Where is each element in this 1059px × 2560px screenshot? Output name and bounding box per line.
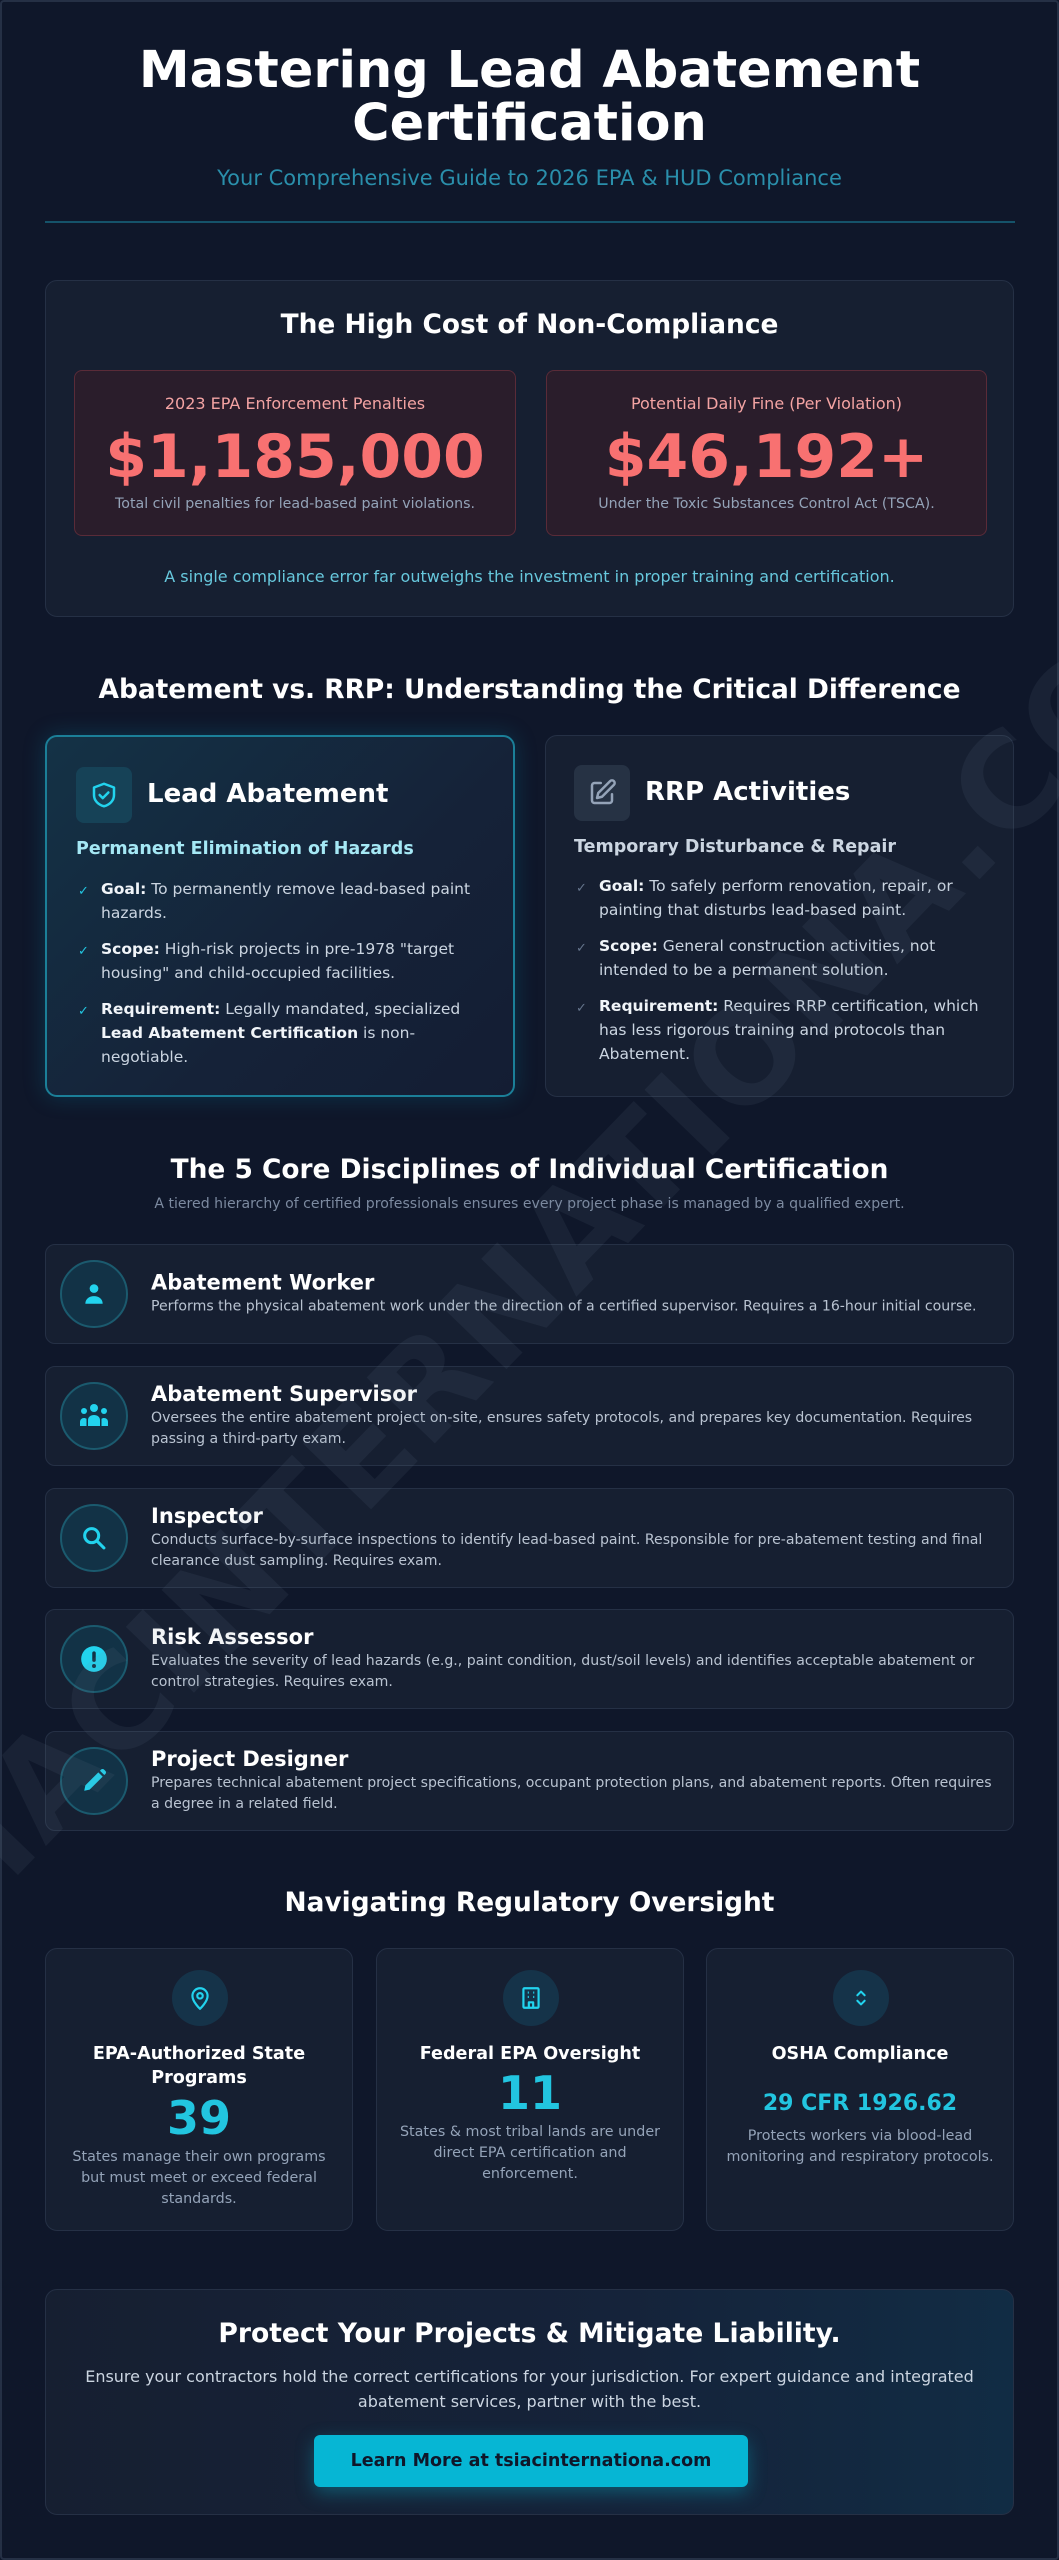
panel: OSHA: Protects workers via blood-lead monitoring and respiratory protocols. <box>726 2128 994 2165</box>
tagline: A single compliance error far outweighs the investment in proper training and certification. <box>164 567 895 586</box>
icon: alert <box>60 1625 128 1693</box>
panel: state programs: Programs <box>151 2068 247 2088</box>
button: Learn More at tsiacinternationa.com <box>351 2451 711 2471</box>
bullet list: ✓ <box>78 944 89 959</box>
row: project designer <box>45 1731 1014 1831</box>
bullet list: ✓ <box>576 881 587 896</box>
button <box>314 2435 748 2487</box>
bullet list: Goal: To safely perform renovation, repair, or painting that disturbs lead-based paint. <box>599 877 953 919</box>
icon: edit <box>574 765 630 821</box>
panel: state programs: EPA-Authorized State <box>93 2044 305 2064</box>
heading: 5 core disciplines: The 5 Core Disciplines of Individual Certification <box>171 1154 888 1185</box>
panel: federal EPA <box>376 1948 684 2231</box>
subheading: Permanent Elimination of Hazards <box>76 839 414 859</box>
bullet list: Requirement: Requires RRP certification, which has less rigorous training and protocols than Abatement. <box>599 997 979 1063</box>
row: inspector: Conducts surface-by-surface inspections to identify lead-based paint. Responsible for pre-abatement testing and final clearance dust sampling. Requires exam. <box>151 1532 982 1569</box>
panel: cost of non-compliance <box>45 280 1014 617</box>
panel: state programs: States manage their own programs but must meet or exceed federal standards. <box>72 2149 326 2207</box>
panel: state programs: 39 <box>167 2091 231 2145</box>
heading: lead abatement: Lead Abatement <box>147 779 388 809</box>
subtitle: disciplines: A tiered hierarchy of certified professionals ensures every project phase is managed by a qualified expert. <box>154 1196 905 1212</box>
stat: daily fine: Under the Toxic Substances Control Act (TSCA). <box>598 496 935 512</box>
icon: group <box>60 1382 128 1450</box>
stat: EPA penalties: 2023 EPA Enforcement Penalties <box>165 394 425 413</box>
title <box>139 41 920 153</box>
bullet list <box>78 880 470 1066</box>
title: Certification <box>352 94 707 153</box>
heading: RRP: RRP Activities <box>645 777 850 807</box>
panel: OSHA: 29 CFR 1926.62 <box>763 2091 957 2116</box>
bullet list <box>576 877 979 1063</box>
panel: lead abatement <box>45 735 515 1097</box>
stat: daily fine: $46,192+ <box>605 422 928 492</box>
panel: call to action <box>45 2289 1014 2515</box>
row: abatement worker: Performs the physical abatement work under the direction of a certified supervisor. Requires a 16-hour initial course. <box>151 1298 976 1314</box>
panel: RRP activities <box>545 735 1014 1097</box>
row: abatement supervisor: Abatement Supervisor <box>151 1382 417 1406</box>
subheading: Temporary Disturbance & Repair <box>574 837 896 857</box>
paragraph: CTA: Ensure your contractors hold the correct certifications for your jurisdiction. For expert guidance and integrated abatement services, partner with the best. <box>85 2367 974 2411</box>
row: abatement worker <box>45 1244 1014 1344</box>
row: risk assessor <box>45 1609 1014 1709</box>
bullet list: Scope: General construction activities, not intended to be a permanent solution. <box>599 937 935 979</box>
panel: federal EPA: 11 <box>498 2066 562 2120</box>
heading: regulatory oversight: Navigating Regulatory Oversight <box>285 1887 774 1918</box>
icon: building <box>503 1970 559 2026</box>
bullet list: Scope: High-risk projects in pre-1978 "target housing" and child-occupied facilities. <box>101 940 454 982</box>
heading: abatement vs RRP: Abatement vs. RRP: Understanding the Critical Difference <box>99 674 960 705</box>
icon: magnifier <box>60 1504 128 1572</box>
row: risk assessor: Risk Assessor <box>151 1625 313 1649</box>
icon: pin <box>172 1970 228 2026</box>
heading: CTA: Protect Your Projects & Mitigate Liability. <box>218 2318 841 2349</box>
row: abatement supervisor <box>45 1366 1014 1466</box>
heading: cost: The High Cost of Non-Compliance <box>281 309 778 340</box>
bullet list: ✓ <box>576 941 587 956</box>
row: abatement supervisor: Oversees the entire abatement project on-site, ensures safety protocols, and prepares key documentation. Requires passing a third-party exam. <box>151 1410 972 1447</box>
bullet list: Requirement: Legally mandated, specialized Lead Abatement Certification is non-negotiable. <box>101 1000 460 1066</box>
panel: OSHA: OSHA Compliance <box>772 2044 948 2064</box>
row: project designer: Project Designer <box>151 1747 348 1771</box>
bullet list: ✓ <box>78 884 89 899</box>
stat: daily fine: Potential Daily Fine (Per Violation) <box>631 394 902 413</box>
row: inspector: Inspector <box>151 1504 263 1528</box>
panel: federal EPA: States & most tribal lands are under direct EPA certification and enforcement. <box>400 2124 660 2182</box>
bullet list: ✓ <box>78 1004 89 1019</box>
panel: state programs <box>45 1948 353 2231</box>
row: risk assessor: Evaluates the severity of lead hazards (e.g., paint condition, dust/soil levels) and identifies acceptable abatement or control strategies. Requires exam. <box>151 1653 974 1690</box>
stat: EPA penalties: Total civil penalties for lead-based paint violations. <box>115 496 475 512</box>
icon: chevrons <box>833 1970 889 2026</box>
row: abatement worker: Abatement Worker <box>151 1270 374 1294</box>
row: inspector <box>45 1488 1014 1588</box>
subtitle: Your Comprehensive Guide to 2026 EPA & HUD Compliance <box>217 166 842 190</box>
stat: EPA penalties <box>74 370 516 536</box>
stat: EPA penalties: $1,185,000 <box>105 422 485 492</box>
icon: pencil <box>60 1747 128 1815</box>
row: project designer: Prepares technical abatement project specifications, occupant protection plans, and abatement reports. Often requires a degree in a related field. <box>151 1775 992 1812</box>
bullet list: Goal: To permanently remove lead-based paint hazards. <box>101 880 470 922</box>
title: Mastering Lead Abatement <box>139 41 920 100</box>
stat: daily fine <box>546 370 987 536</box>
icon: person <box>60 1260 128 1328</box>
bullet list: ✓ <box>576 1001 587 1016</box>
icon: shield <box>76 767 132 823</box>
panel: OSHA <box>706 1948 1014 2231</box>
panel: federal EPA: Federal EPA Oversight <box>420 2044 640 2064</box>
